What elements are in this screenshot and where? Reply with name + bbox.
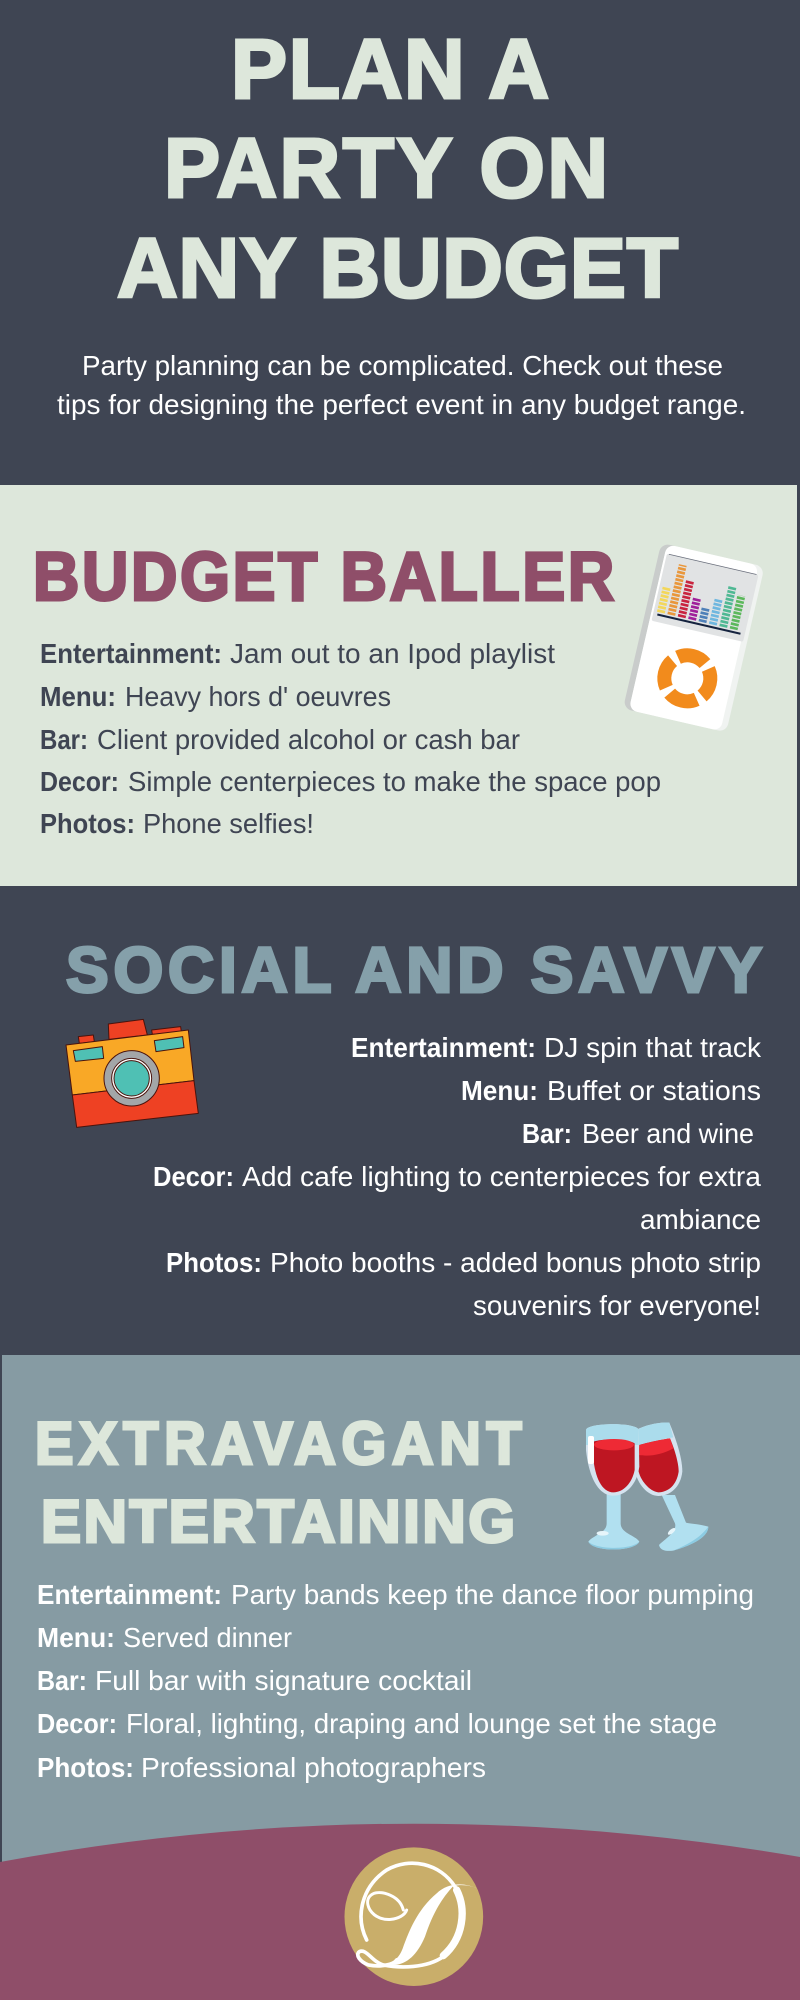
tips list: budget baller: Menu:	[40, 681, 116, 712]
title	[117, 22, 678, 315]
tips list: social and savvy: Bar:	[522, 1118, 572, 1149]
panel: extravagant entertaining	[2, 1355, 800, 1875]
tips list: extravagant entertaining: Professional photographers	[141, 1752, 486, 1783]
tips list: extravagant entertaining: Served dinner	[123, 1622, 292, 1653]
tips list: social and savvy: Beer and wine	[582, 1118, 754, 1149]
heading: extravagant entertaining	[35, 1411, 522, 1555]
panel: budget baller	[0, 485, 797, 886]
panel: title header	[57, 22, 746, 420]
heading: extravagant entertaining: EXTRAVAGANT	[35, 1411, 522, 1477]
tips list: social and savvy: Photos:	[166, 1247, 262, 1278]
title: ANY BUDGET	[117, 221, 678, 315]
tips list: budget baller: Decor:	[40, 766, 119, 797]
tips list: budget baller: Jam out to an Ipod playlist	[230, 638, 555, 669]
tips list: social and savvy: Add cafe lighting to centerpieces for extra	[242, 1161, 761, 1192]
tips list: budget baller: Entertainment:	[40, 638, 222, 669]
tips list: budget baller: Simple centerpieces to make the space pop	[128, 766, 661, 797]
tips list: extravagant entertaining: Party bands keep the dance floor pumping	[231, 1579, 754, 1610]
icon: wine glasses	[586, 1422, 708, 1551]
intro text: Party planning can be complicated. Check out these	[82, 350, 723, 381]
tips list: budget baller: Bar:	[40, 724, 88, 755]
tips list: extravagant entertaining: Entertainment:	[37, 1579, 222, 1610]
tips list: social and savvy: DJ spin that track	[544, 1032, 762, 1063]
tips list: extravagant entertaining: Bar:	[37, 1665, 87, 1696]
tips list: extravagant entertaining	[37, 1579, 754, 1783]
tips list: extravagant entertaining: Decor:	[37, 1708, 117, 1739]
tips list: extravagant entertaining: Floral, lighting, draping and lounge set the stage	[126, 1708, 717, 1739]
intro text: tips for designing the perfect event in any budget range.	[57, 389, 746, 420]
tips list: social and savvy: Photo booths - added bonus photo strip	[270, 1247, 761, 1278]
heading: budget baller: BUDGET BALLER	[33, 539, 614, 616]
tips list: social and savvy: Menu:	[461, 1075, 538, 1106]
panel: social and savvy	[0, 886, 800, 1355]
heading: extravagant entertaining: ENTERTAINING	[41, 1488, 515, 1555]
tips list: social and savvy: Entertainment:	[351, 1032, 536, 1063]
icon: camera	[66, 1019, 198, 1127]
tips list: social and savvy: souvenirs for everyone!	[473, 1290, 761, 1321]
intro text	[57, 350, 746, 420]
tips list: social and savvy: Buffet or stations	[547, 1075, 761, 1106]
title: PLAN A	[231, 22, 549, 116]
tips list: extravagant entertaining: Full bar with signature cocktail	[95, 1665, 472, 1696]
panel: footer wave	[0, 1824, 800, 2000]
tips list: budget baller: Heavy hors d' oeuvres	[125, 681, 391, 712]
tips list: social and savvy: Decor:	[153, 1161, 234, 1192]
tips list: budget baller: Client provided alcohol or cash bar	[97, 724, 520, 755]
icon: monogram logo	[344, 1847, 483, 1986]
title: PARTY ON	[164, 121, 608, 215]
tips list: extravagant entertaining: Menu:	[37, 1622, 115, 1653]
tips list: budget baller: Phone selfies!	[143, 808, 314, 839]
tips list: social and savvy	[153, 1032, 762, 1321]
tips list: social and savvy: ambiance	[640, 1204, 761, 1235]
tips list: budget baller	[40, 638, 661, 839]
tips list: extravagant entertaining: Photos:	[37, 1752, 134, 1783]
tips list: budget baller: Photos:	[40, 808, 135, 839]
heading: social and savvy: SOCIAL AND SAVVY	[66, 934, 762, 1006]
icon: music player	[623, 543, 764, 732]
